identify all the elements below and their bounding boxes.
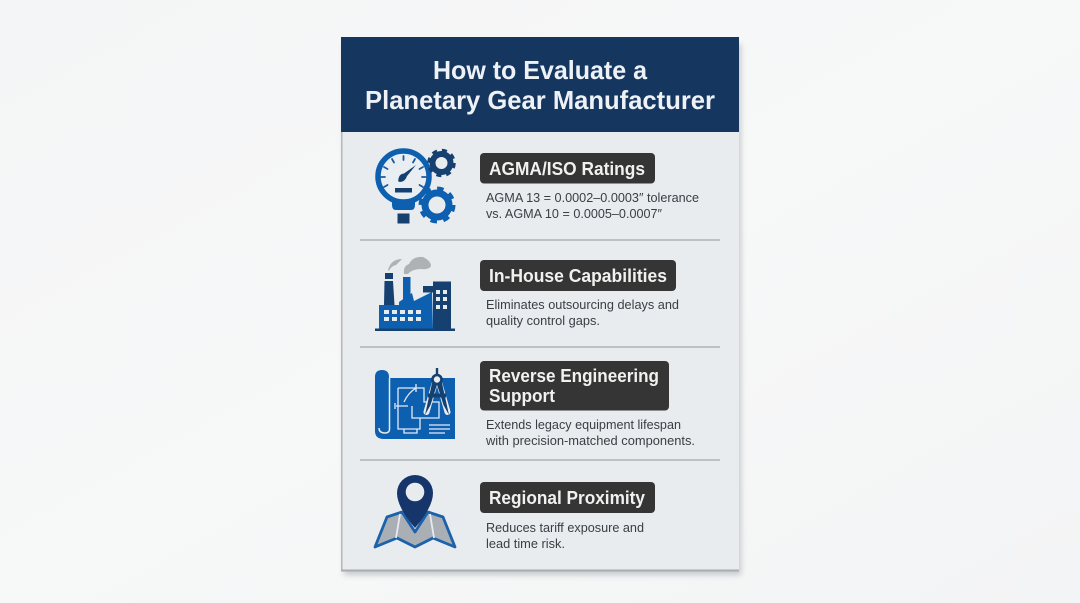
header banner (341, 37, 739, 132)
description: Extends legacy equipment lifespan (486, 418, 681, 432)
heading badge (480, 361, 669, 410)
title: Planetary Gear Manufacturer (365, 85, 715, 115)
heading badge (480, 482, 655, 513)
heading badge (480, 260, 676, 291)
description: lead time risk. (486, 537, 565, 551)
heading badge: AGMA/ISO Ratings (489, 159, 645, 179)
description: Reduces tariff exposure and (486, 521, 644, 535)
description (486, 191, 699, 221)
description: vs. AGMA 10 = 0.0005–0.0007″ (486, 207, 663, 221)
description: quality control gaps. (486, 314, 600, 328)
panel: poster card (341, 37, 739, 572)
heading badge: Support (489, 386, 555, 406)
row: In-House Capabilities (375, 257, 679, 331)
heading badge (480, 153, 655, 184)
icon: factory (375, 257, 455, 331)
description: AGMA 13 = 0.0002–0.0003″ tolerance (486, 191, 699, 205)
title (365, 55, 715, 115)
row: Regional Proximity (375, 475, 655, 551)
icon: blueprint and compass (375, 368, 455, 439)
icon: pressure gauge and gears (378, 150, 454, 224)
row: AGMA/ISO Ratings (378, 150, 699, 224)
heading badge: In-House Capabilities (489, 266, 667, 286)
description: Eliminates outsourcing delays and (486, 298, 679, 312)
heading badge: Reverse Engineering (489, 366, 659, 386)
description (486, 521, 644, 551)
description (485, 418, 695, 448)
description: with precision-matched components. (485, 434, 695, 448)
description (486, 298, 679, 328)
icon: map pin (375, 475, 455, 547)
heading badge: Regional Proximity (489, 488, 645, 508)
title: How to Evaluate a (433, 55, 648, 85)
row: Reverse Engineering Support (375, 361, 695, 448)
